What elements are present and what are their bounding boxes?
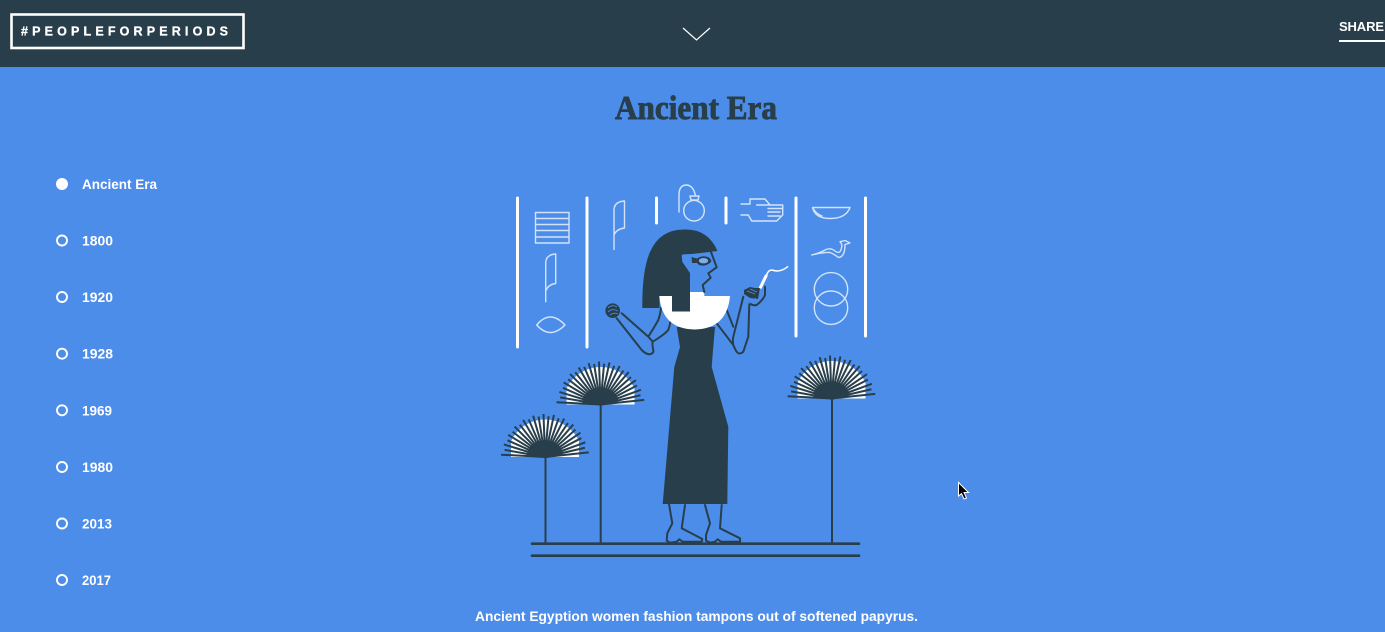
timeline item: 1969: 1969 [82, 403, 112, 418]
dress [663, 327, 728, 504]
glyph: feather centre [614, 201, 624, 250]
timeline item: 1920 [57, 290, 113, 305]
tampon with string [760, 267, 788, 288]
share link: SHARE [1339, 19, 1384, 34]
palm fan left [501, 414, 589, 544]
timeline item: 2013 [57, 516, 112, 532]
glyph: bowl [812, 208, 850, 218]
glyph: two rings [814, 273, 848, 306]
glyph: snake [812, 240, 850, 258]
timeline item: 1800: 1800 [82, 234, 113, 248]
timeline item: 1980: 1980 [82, 460, 113, 475]
icon: chevron down [683, 28, 710, 40]
top navigation bar [0, 0, 1385, 67]
glyph: stacked grid [536, 212, 569, 243]
timeline item: 2017: 2017 [82, 573, 111, 588]
caption: Ancient Egyption women fashion tampons out of softened papyrus. [475, 608, 918, 624]
timeline item: 1928: 1928 [82, 347, 113, 362]
glyph: eye [537, 317, 565, 332]
palm fans [501, 356, 875, 544]
hashtag button: #PEOPLEFORPERIODS [21, 24, 228, 38]
title: Ancient Era [615, 90, 777, 127]
glyph: flask [679, 185, 704, 221]
timeline item: 2017 [57, 573, 111, 588]
timeline item: 1980 [57, 460, 113, 475]
glyph: hand [741, 199, 783, 221]
hieroglyph column dividers [518, 198, 866, 347]
timeline item: 2013: 2013 [82, 516, 112, 532]
icon: mouse cursor [958, 482, 968, 499]
fist [605, 303, 620, 318]
ground lines [532, 544, 859, 556]
timeline item: 1928 [57, 347, 113, 362]
hashtag button [12, 14, 244, 48]
hair [642, 229, 718, 308]
timeline item: 1969 [57, 403, 112, 418]
illustration: Egyptian woman with hieroglyphs and palms [501, 185, 875, 556]
hair lock [672, 280, 690, 312]
woman figure [605, 229, 788, 543]
eye [692, 256, 711, 266]
arms [617, 287, 765, 354]
glyph: feather left [546, 254, 556, 302]
collar [659, 292, 730, 330]
hieroglyphs [536, 185, 850, 332]
palm fan right [788, 356, 875, 544]
timeline item: Ancient Era: Ancient Era [82, 177, 157, 192]
timeline navigation [56, 177, 157, 588]
timeline item: 1920: 1920 [82, 290, 113, 305]
raised hand [744, 287, 760, 304]
timeline item: 1800 [57, 234, 113, 248]
legs and feet [667, 504, 740, 543]
palm fan middle [557, 362, 644, 544]
share link [1339, 19, 1385, 42]
face profile [703, 252, 717, 292]
